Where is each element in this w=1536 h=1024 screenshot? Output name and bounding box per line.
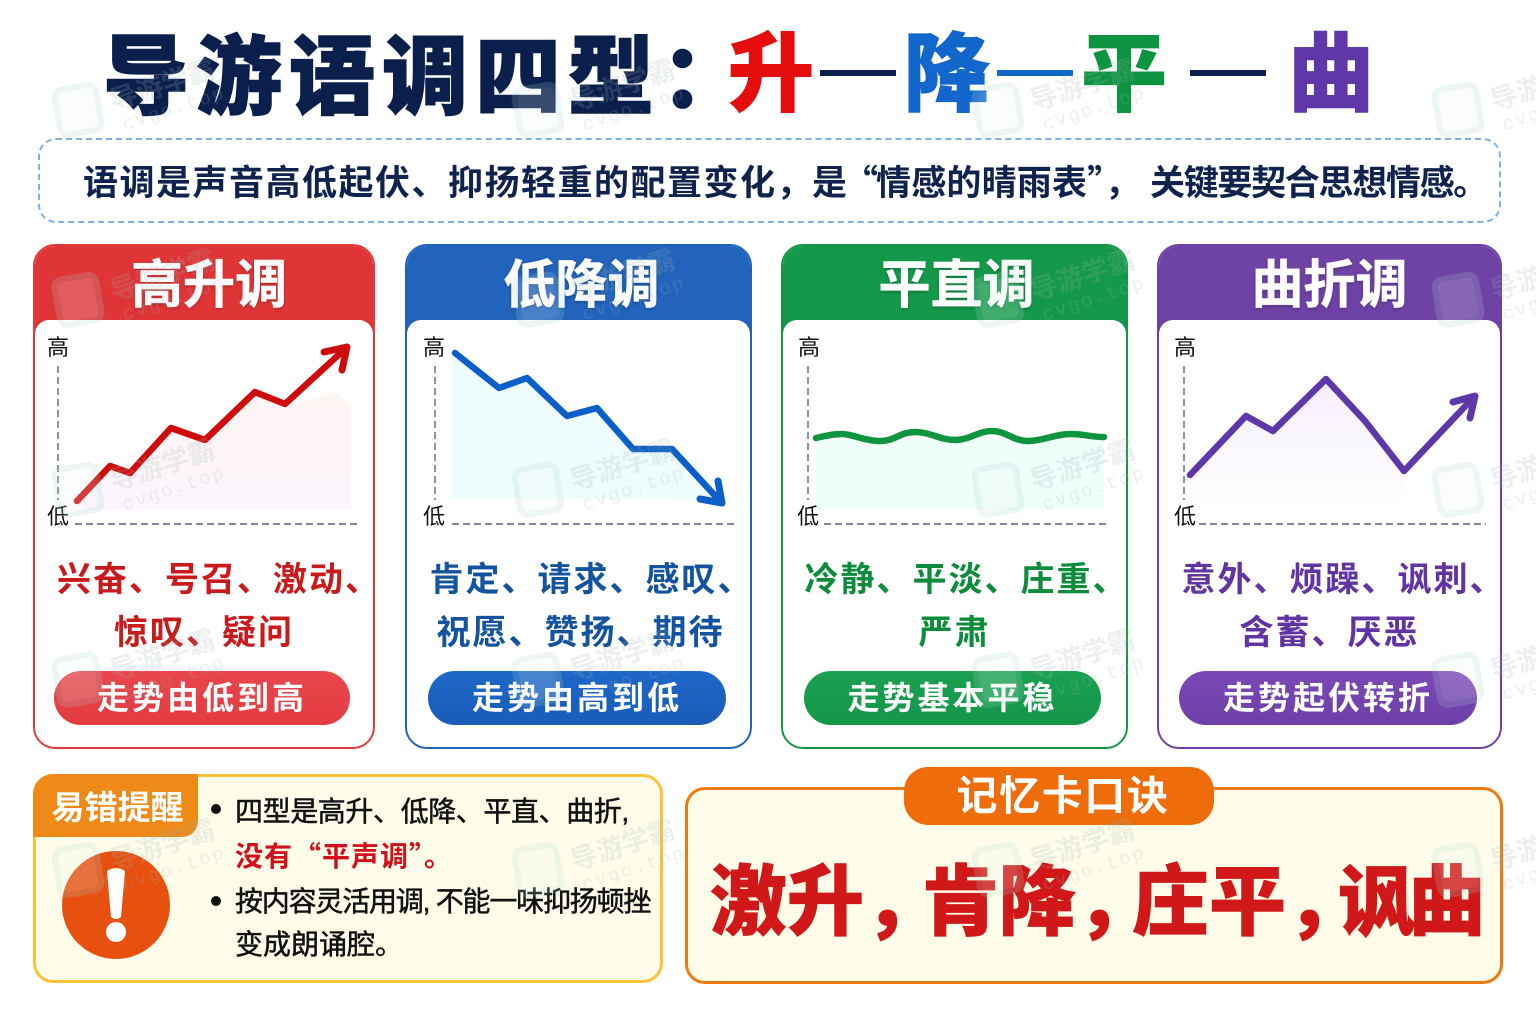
chart: falling line xyxy=(434,350,734,525)
emotion words: 含蓄、厌恶 xyxy=(1240,614,1420,652)
trend pill: 走势起伏转折 xyxy=(1223,680,1433,716)
title: 平 xyxy=(1081,27,1167,123)
tab: 记忆卡口诀 xyxy=(904,767,1214,825)
emotion words xyxy=(57,561,375,652)
mistake list: 按内容灵活用调, 不能一味抑扬顿挫 xyxy=(235,886,650,917)
trend pill xyxy=(1179,671,1477,725)
axis label low: 低 xyxy=(423,504,445,529)
watermark layer: 导游学霸 xyxy=(567,815,679,876)
watermark layer: cvgo.top xyxy=(120,842,228,896)
memory phrase: 讽曲 xyxy=(1338,841,1479,952)
header: 低降调: 低降调 xyxy=(503,257,660,315)
header: 低降调 xyxy=(407,246,750,346)
title: 升 xyxy=(728,27,814,123)
emotion words: 意外、烦躁、讽刺、 xyxy=(1182,561,1502,599)
bullet 1 xyxy=(211,804,221,814)
emotion words: 兴奋、号召、激动、 xyxy=(57,561,375,599)
watermark layer: 导游学霸 xyxy=(107,245,219,306)
axis label high: 高 xyxy=(423,335,445,360)
watermark layer: 导游学霸 xyxy=(107,435,219,496)
watermark layer: cvgo.top xyxy=(1040,462,1148,516)
header: 高升调 xyxy=(35,246,373,346)
emotion words: 祝愿、赞扬、期待 xyxy=(436,614,724,652)
header: 高升调: 高升调 xyxy=(131,257,287,315)
axis label high: 高 xyxy=(1174,335,1196,360)
axis label low: 低 xyxy=(1174,504,1196,529)
mistake list: 没有“平声调”。 xyxy=(235,835,453,875)
watermark layer: cvgo.top xyxy=(120,462,228,516)
trend pill: 走势由高到低 xyxy=(472,680,682,716)
definition banner xyxy=(38,138,1501,223)
trend pill xyxy=(428,671,726,725)
axis label low: 低 xyxy=(797,504,819,529)
watermark layer: 导游学霸 xyxy=(1027,55,1139,116)
bullet 2 xyxy=(211,896,221,906)
mistake list xyxy=(211,796,651,960)
title: 导游语调四型： xyxy=(103,7,754,132)
title xyxy=(103,7,1374,132)
emotion words: 惊叹、疑问 xyxy=(114,614,294,652)
title: 降 xyxy=(904,27,990,123)
watermark layer: 导游学霸 xyxy=(1027,625,1139,686)
trend pill xyxy=(804,671,1101,725)
watermark layer: 导游学霸 xyxy=(567,435,679,496)
icon: warning exclamation xyxy=(62,851,170,959)
memory phrase xyxy=(710,841,1480,952)
watermark layer: cvgo.top xyxy=(1040,842,1148,896)
trend pill: 走势由低到高 xyxy=(97,680,307,716)
trend pill xyxy=(54,671,350,725)
panel: common mistakes xyxy=(33,774,663,983)
panel: 曲折调 xyxy=(1157,244,1502,749)
mistake list: 变成朗诵腔。 xyxy=(235,929,403,960)
emotion words xyxy=(1182,561,1502,652)
tag: 易错提醒 xyxy=(33,774,198,837)
emotion words: 严肃 xyxy=(918,614,990,652)
panel: 高升调 xyxy=(33,244,375,749)
watermark layer: cvgo.top xyxy=(580,272,688,326)
watermark layer: 导游学霸 xyxy=(1027,245,1139,306)
memory phrase: 激升， xyxy=(710,841,941,952)
watermark layer: cvgo.top xyxy=(580,842,688,896)
chart: flat wavy line xyxy=(807,366,1108,525)
axis label low: 低 xyxy=(47,504,69,529)
watermark layer: cvgo.top xyxy=(120,82,228,136)
emotion words xyxy=(804,561,1128,652)
watermark layer: 导游学霸 xyxy=(1027,815,1139,876)
definition banner: 关键要契合思想情感。 xyxy=(1150,155,1487,206)
header: 曲折调: 曲折调 xyxy=(1251,257,1408,315)
trend pill: 走势基本平稳 xyxy=(847,680,1058,716)
watermark layer: cvgo.top xyxy=(580,82,688,136)
watermark layer: 导游学霸 xyxy=(567,55,679,116)
memory phrase: 庄平， xyxy=(1132,841,1363,952)
memory phrase: 肯降， xyxy=(922,841,1153,952)
definition banner: 是“ xyxy=(812,155,874,206)
watermark layer: 导游学霸 xyxy=(567,245,679,306)
watermark layer: 导游学霸 xyxy=(1027,435,1139,496)
header: 平直调 xyxy=(783,246,1126,346)
header: 平直调: 平直调 xyxy=(878,257,1034,315)
tab: 记忆卡口诀: 记忆卡口诀 xyxy=(956,773,1170,819)
watermark layer: cvgo.top xyxy=(1040,652,1148,706)
watermark layer: 导游学霸 xyxy=(107,625,219,686)
watermark layer: cvgo.top xyxy=(580,462,688,516)
panel: 低降调 xyxy=(405,244,752,749)
axis label high: 高 xyxy=(47,335,69,360)
panel: memory card xyxy=(685,787,1503,984)
chart: zigzag line xyxy=(1183,366,1486,525)
emotion words: 冷静、平淡、庄重、 xyxy=(804,561,1128,599)
watermark layer: cvgo.top xyxy=(120,272,228,326)
watermark layer: 导游学霸 xyxy=(107,55,219,116)
chart: rising line xyxy=(57,344,357,525)
watermark layer: 导游学霸 xyxy=(107,815,219,876)
mistake list: 四型是高升、低降、平直、曲折, xyxy=(235,796,629,827)
header: 曲折调 xyxy=(1159,246,1500,346)
emotion words xyxy=(430,561,752,652)
watermark layer: cvgo.top xyxy=(1040,82,1148,136)
watermark layer: cvgo.top xyxy=(580,652,688,706)
axis label high: 高 xyxy=(798,335,820,360)
definition banner: 语调是声音高低起伏、抑扬轻重的配置变化， xyxy=(83,155,813,206)
watermark layer: 导游学霸 xyxy=(567,625,679,686)
watermark layer: cvgo.top xyxy=(120,652,228,706)
watermark layer: cvgo.top xyxy=(1040,272,1148,326)
panel: 平直调 xyxy=(781,244,1128,749)
tag: 易错提醒: 易错提醒 xyxy=(52,789,184,826)
title: 曲 xyxy=(1288,27,1374,123)
definition banner: 情感的晴雨表”， xyxy=(876,155,1140,206)
emotion words: 肯定、请求、感叹、 xyxy=(430,561,752,599)
